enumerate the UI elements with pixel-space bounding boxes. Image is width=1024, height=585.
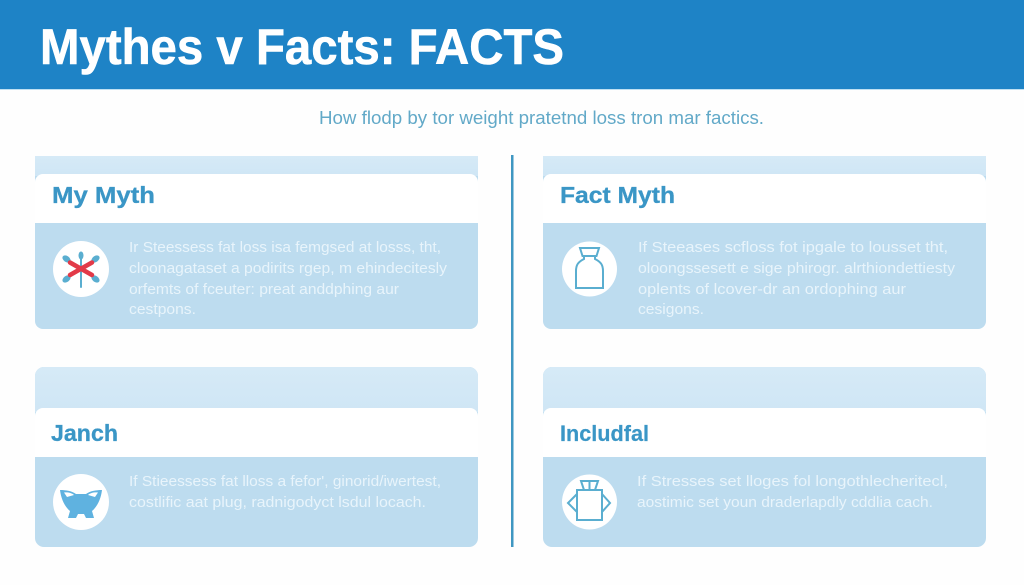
- panel: janch: [35, 367, 478, 547]
- body text: [638, 239, 956, 318]
- body text: cloonagataset a podirits rgep, m ehindecitesly: [129, 260, 448, 277]
- icon: bottle: [562, 242, 617, 296]
- body text: costlific aat plug, radnigodyct lsdul locach.: [129, 494, 426, 511]
- title: Mythes v Facts: FACTS: [40, 19, 564, 75]
- panel: includfal: [543, 367, 986, 547]
- body text: aostimic set youn draderlapdly cddlia cach.: [637, 494, 933, 511]
- body text: Ir Steessess fat loss isa femgsed at losss, tht,: [129, 239, 441, 256]
- body text: [637, 473, 948, 511]
- body text: orfemts of fceuter: preat anddphing aur: [129, 281, 399, 298]
- icon: bowl: [53, 474, 109, 530]
- body text: oloongssesett e sige phirogr. alrthiondettiesty: [638, 260, 956, 277]
- icon: crossed molecule: [53, 241, 109, 297]
- body text: oplents of lcover-dr an ordophing aur: [638, 281, 906, 298]
- heading: Janch: [51, 420, 118, 446]
- body text: If Stieessess fat lloss a fefor', ginorid/iwertest,: [129, 473, 441, 490]
- body text: cesigons.: [638, 301, 704, 318]
- panel: fact myth: [543, 156, 986, 329]
- center divider: [511, 155, 514, 547]
- body text: If Stresses set lloges fol longothlecheritecl,: [637, 473, 948, 490]
- body text: [129, 239, 448, 318]
- body text: If Steeases scfloss fot ipgale to lousset tht,: [638, 239, 948, 256]
- body text: cestpons.: [129, 301, 196, 318]
- heading: Fact Myth: [560, 182, 675, 208]
- icon: shirt bottle: [562, 474, 617, 530]
- heading: Includfal: [560, 421, 649, 446]
- panel: my myth: [35, 156, 478, 329]
- body text: [129, 473, 441, 511]
- title banner: [0, 0, 1024, 90]
- subtitle: How flodp by tor weight pratetnd loss tron mar factics.: [319, 108, 764, 128]
- heading: My Myth: [52, 182, 155, 208]
